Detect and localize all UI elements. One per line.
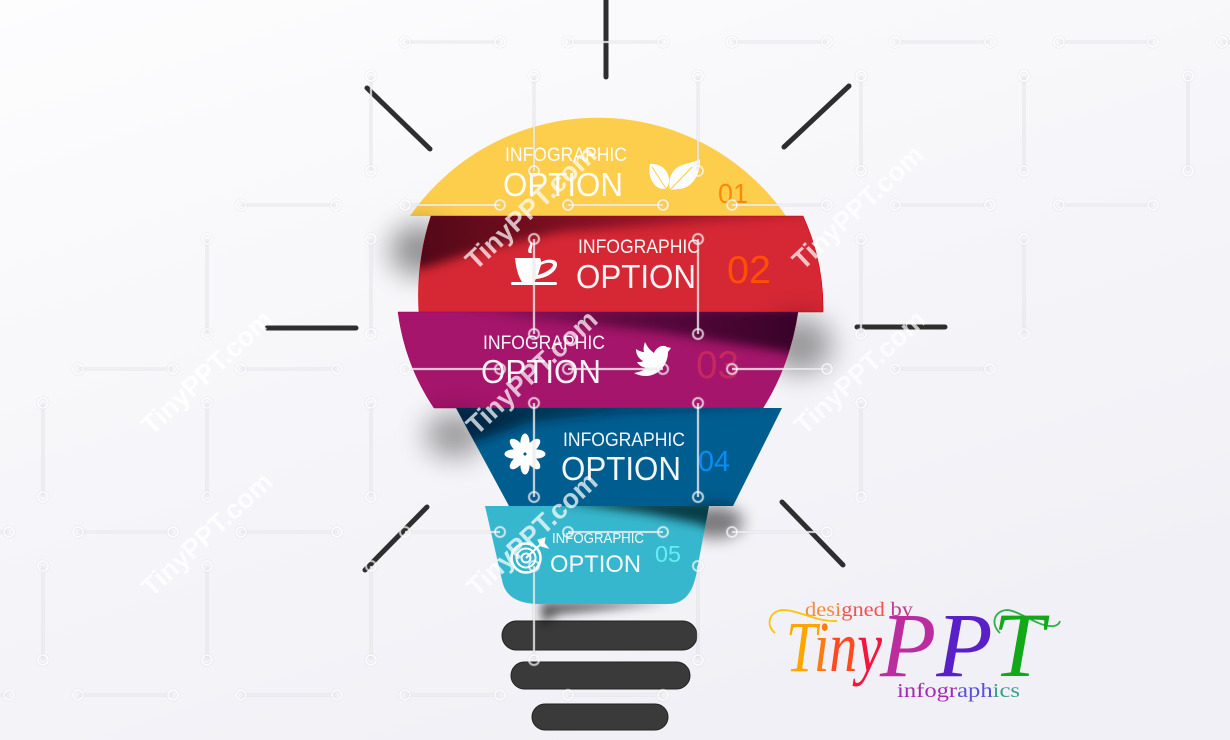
watermarks: TinyPPT.com bbox=[788, 304, 931, 441]
heading: option 01: INFOGRAPHIC bbox=[505, 145, 627, 166]
logo: designed by TinyPPT infographics bbox=[770, 594, 1060, 702]
number 04: 04 bbox=[698, 446, 730, 478]
number 01: 01 bbox=[718, 178, 748, 209]
heading: option 05: OPTION bbox=[550, 551, 641, 578]
bulb base bbox=[502, 621, 697, 730]
logo: designed by TinyPPT infographics: Tiny bbox=[786, 607, 882, 687]
icon: light rays bbox=[267, 0, 945, 570]
panel: option 01 bbox=[410, 118, 786, 216]
heading: option 02: OPTION bbox=[576, 258, 696, 295]
icon: leaves bbox=[649, 159, 700, 192]
watermarks: TinyPPT.com bbox=[460, 466, 603, 603]
icon: flower bbox=[504, 434, 546, 474]
heading: option 04: OPTION bbox=[561, 450, 681, 487]
heading: option 04 bbox=[561, 430, 685, 487]
heading: option 02: INFOGRAPHIC bbox=[578, 237, 700, 258]
heading: option 01 bbox=[503, 145, 627, 203]
heading: option 03 bbox=[481, 333, 605, 390]
panel: option 02 bbox=[410, 208, 823, 312]
panel: option 03 bbox=[398, 308, 810, 408]
heading: option 01: OPTION bbox=[503, 166, 623, 203]
shadow: option 05 outside bbox=[687, 506, 743, 538]
watermarks: TinyPPT.com bbox=[786, 139, 929, 276]
watermarks: TinyPPT.com bbox=[135, 466, 278, 603]
logo: designed by TinyPPT infographics: infogr aph ics bbox=[897, 680, 1020, 702]
heading: option 03: INFOGRAPHIC bbox=[483, 333, 605, 354]
panel: option 05 bbox=[485, 506, 709, 604]
shadow: under option 05 bbox=[540, 602, 670, 624]
watermarks: TinyPPT.com bbox=[135, 304, 278, 441]
heading: option 05 bbox=[550, 531, 644, 578]
shadow: option 02 outside bbox=[390, 224, 450, 276]
number 05: 05 bbox=[655, 541, 681, 567]
number 03: 03 bbox=[696, 344, 739, 387]
heading: option 05: INFOGRAPHIC bbox=[552, 531, 644, 547]
heading: option 04: INFOGRAPHIC bbox=[563, 430, 685, 451]
heading: option 03: OPTION bbox=[481, 353, 601, 390]
watermarks: TinyPPT.com bbox=[459, 139, 602, 276]
number 02: 02 bbox=[727, 249, 771, 292]
logo: designed by TinyPPT infographics: designed by bbox=[805, 599, 914, 621]
watermarks bbox=[135, 139, 931, 603]
panel: option 04 bbox=[445, 402, 782, 506]
heading: option 02 bbox=[576, 237, 700, 295]
watermarks: TinyPPT.com bbox=[460, 304, 603, 441]
shadow: option 04 outside bbox=[425, 413, 485, 457]
shadow: option 03 outside bbox=[768, 317, 832, 373]
logo: designed by TinyPPT infographics: PPT bbox=[879, 594, 1050, 696]
icon: coffee cup bbox=[511, 241, 557, 285]
icon: bird bbox=[634, 342, 671, 376]
icon: target bbox=[512, 538, 548, 572]
